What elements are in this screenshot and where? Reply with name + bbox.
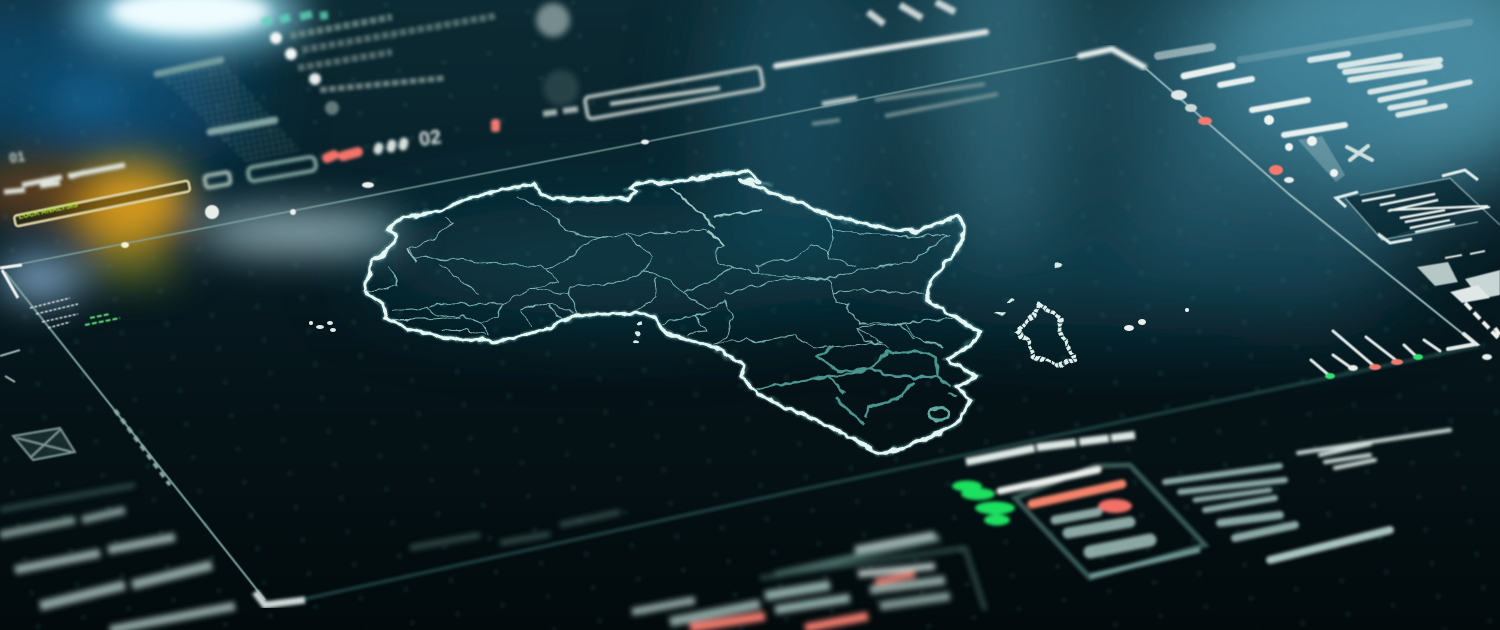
panel: bottom left interface — [0, 485, 235, 630]
dots east of Madagascar — [1124, 308, 1189, 331]
glyph row at left — [4, 165, 125, 192]
country borders — [364, 197, 952, 348]
cross box icon — [13, 428, 75, 460]
islands — [633, 263, 1060, 344]
panel: top centre interface — [543, 2, 998, 124]
numeric read-out 01: 01 — [8, 148, 26, 166]
continent outline glow — [364, 172, 980, 455]
southern borders — [756, 347, 957, 425]
Madagascar — [1017, 305, 1077, 365]
top glow highlight — [110, 0, 270, 34]
data table — [30, 298, 120, 328]
blurred glow dots — [536, 3, 570, 37]
lock status bar — [14, 180, 190, 227]
cross icon — [1347, 146, 1372, 160]
tick bars — [1311, 331, 1476, 377]
panel: bottom centre interface — [410, 512, 985, 628]
alert table — [1000, 465, 1205, 578]
text bars — [1158, 22, 1470, 135]
islands west of Africa — [309, 321, 336, 332]
side ticks — [115, 410, 170, 485]
frame markers — [121, 90, 1294, 248]
lock status bar: LOCK ANALYSIS — [18, 200, 78, 221]
green indicators — [952, 480, 1015, 526]
data grid — [1417, 251, 1500, 340]
small info panel — [1336, 170, 1500, 243]
numeric read-out 02: 02 — [418, 126, 443, 151]
table widget — [157, 60, 300, 162]
tick bar markers — [1325, 354, 1492, 379]
heading bar — [966, 435, 1135, 462]
red and white indicators — [204, 119, 500, 188]
bright straight borders — [407, 188, 761, 262]
status dots and list — [262, 14, 495, 115]
continent outline — [364, 172, 980, 455]
panel: top right interface — [1158, 22, 1500, 379]
text blocks — [1165, 430, 1450, 560]
panel: top left interface — [4, 3, 579, 192]
hatched strip — [1298, 136, 1345, 182]
map of Africa — [364, 172, 1077, 455]
panel: lower right interface — [952, 430, 1450, 578]
Lesotho ring — [929, 408, 950, 420]
left frame detail — [0, 298, 170, 485]
